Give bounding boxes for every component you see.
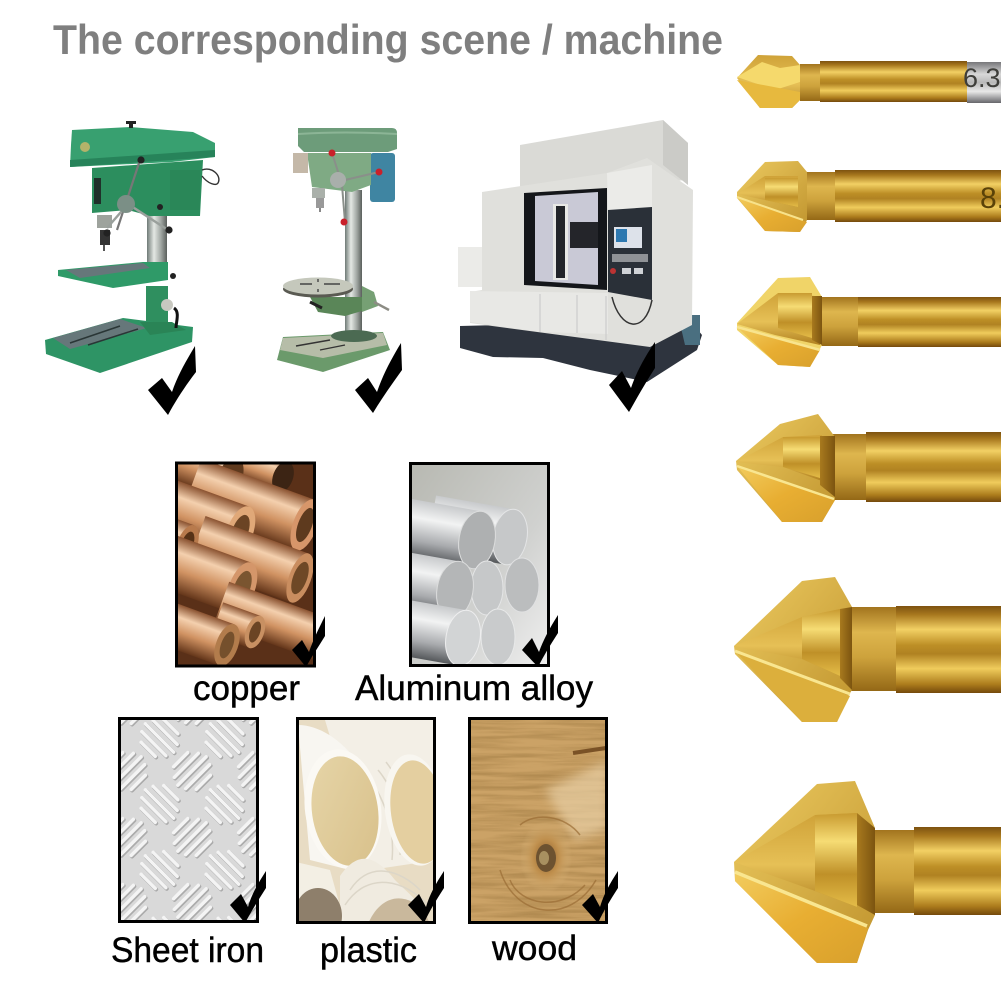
check mark: column drill press <box>355 343 402 413</box>
label: plastic: plastic <box>320 931 417 970</box>
machine: bench drill press, green <box>45 121 219 373</box>
check mark: aluminum <box>522 615 558 667</box>
check mark: copper <box>292 616 325 667</box>
drill bit 6 <box>734 781 1001 963</box>
material panel: wood <box>468 717 609 924</box>
check mark: sheet iron <box>230 871 266 923</box>
drill bit 1: 6.3 <box>737 55 1001 108</box>
material panel: copper <box>175 462 316 668</box>
material panel: aluminum alloy <box>409 462 550 667</box>
label: copper: copper <box>193 669 300 708</box>
check mark: plastic <box>408 871 444 923</box>
drill bit 2: 8 <box>737 161 1001 232</box>
machine: CNC machining centre <box>458 120 702 382</box>
label: size 6.3: 6.3 <box>963 63 1001 93</box>
title: The corresponding scene / machine <box>53 16 723 63</box>
label: aluminum alloy: Aluminum alloy <box>355 669 593 708</box>
check mark: CNC machining centre <box>609 342 655 412</box>
label: sheet iron: Sheet iron <box>111 931 264 970</box>
machine: column drill press, sage green with blue motor <box>277 128 397 372</box>
label: wood: wood <box>491 929 577 968</box>
drill bit 3 <box>737 277 1001 367</box>
material panel: sheet iron <box>118 717 259 923</box>
material panel: plastic <box>296 717 436 924</box>
check mark: wood <box>582 871 618 923</box>
drill bit 4 <box>736 414 1001 522</box>
check mark: bench drill press <box>148 346 196 415</box>
drill bit 5 <box>734 577 1001 722</box>
